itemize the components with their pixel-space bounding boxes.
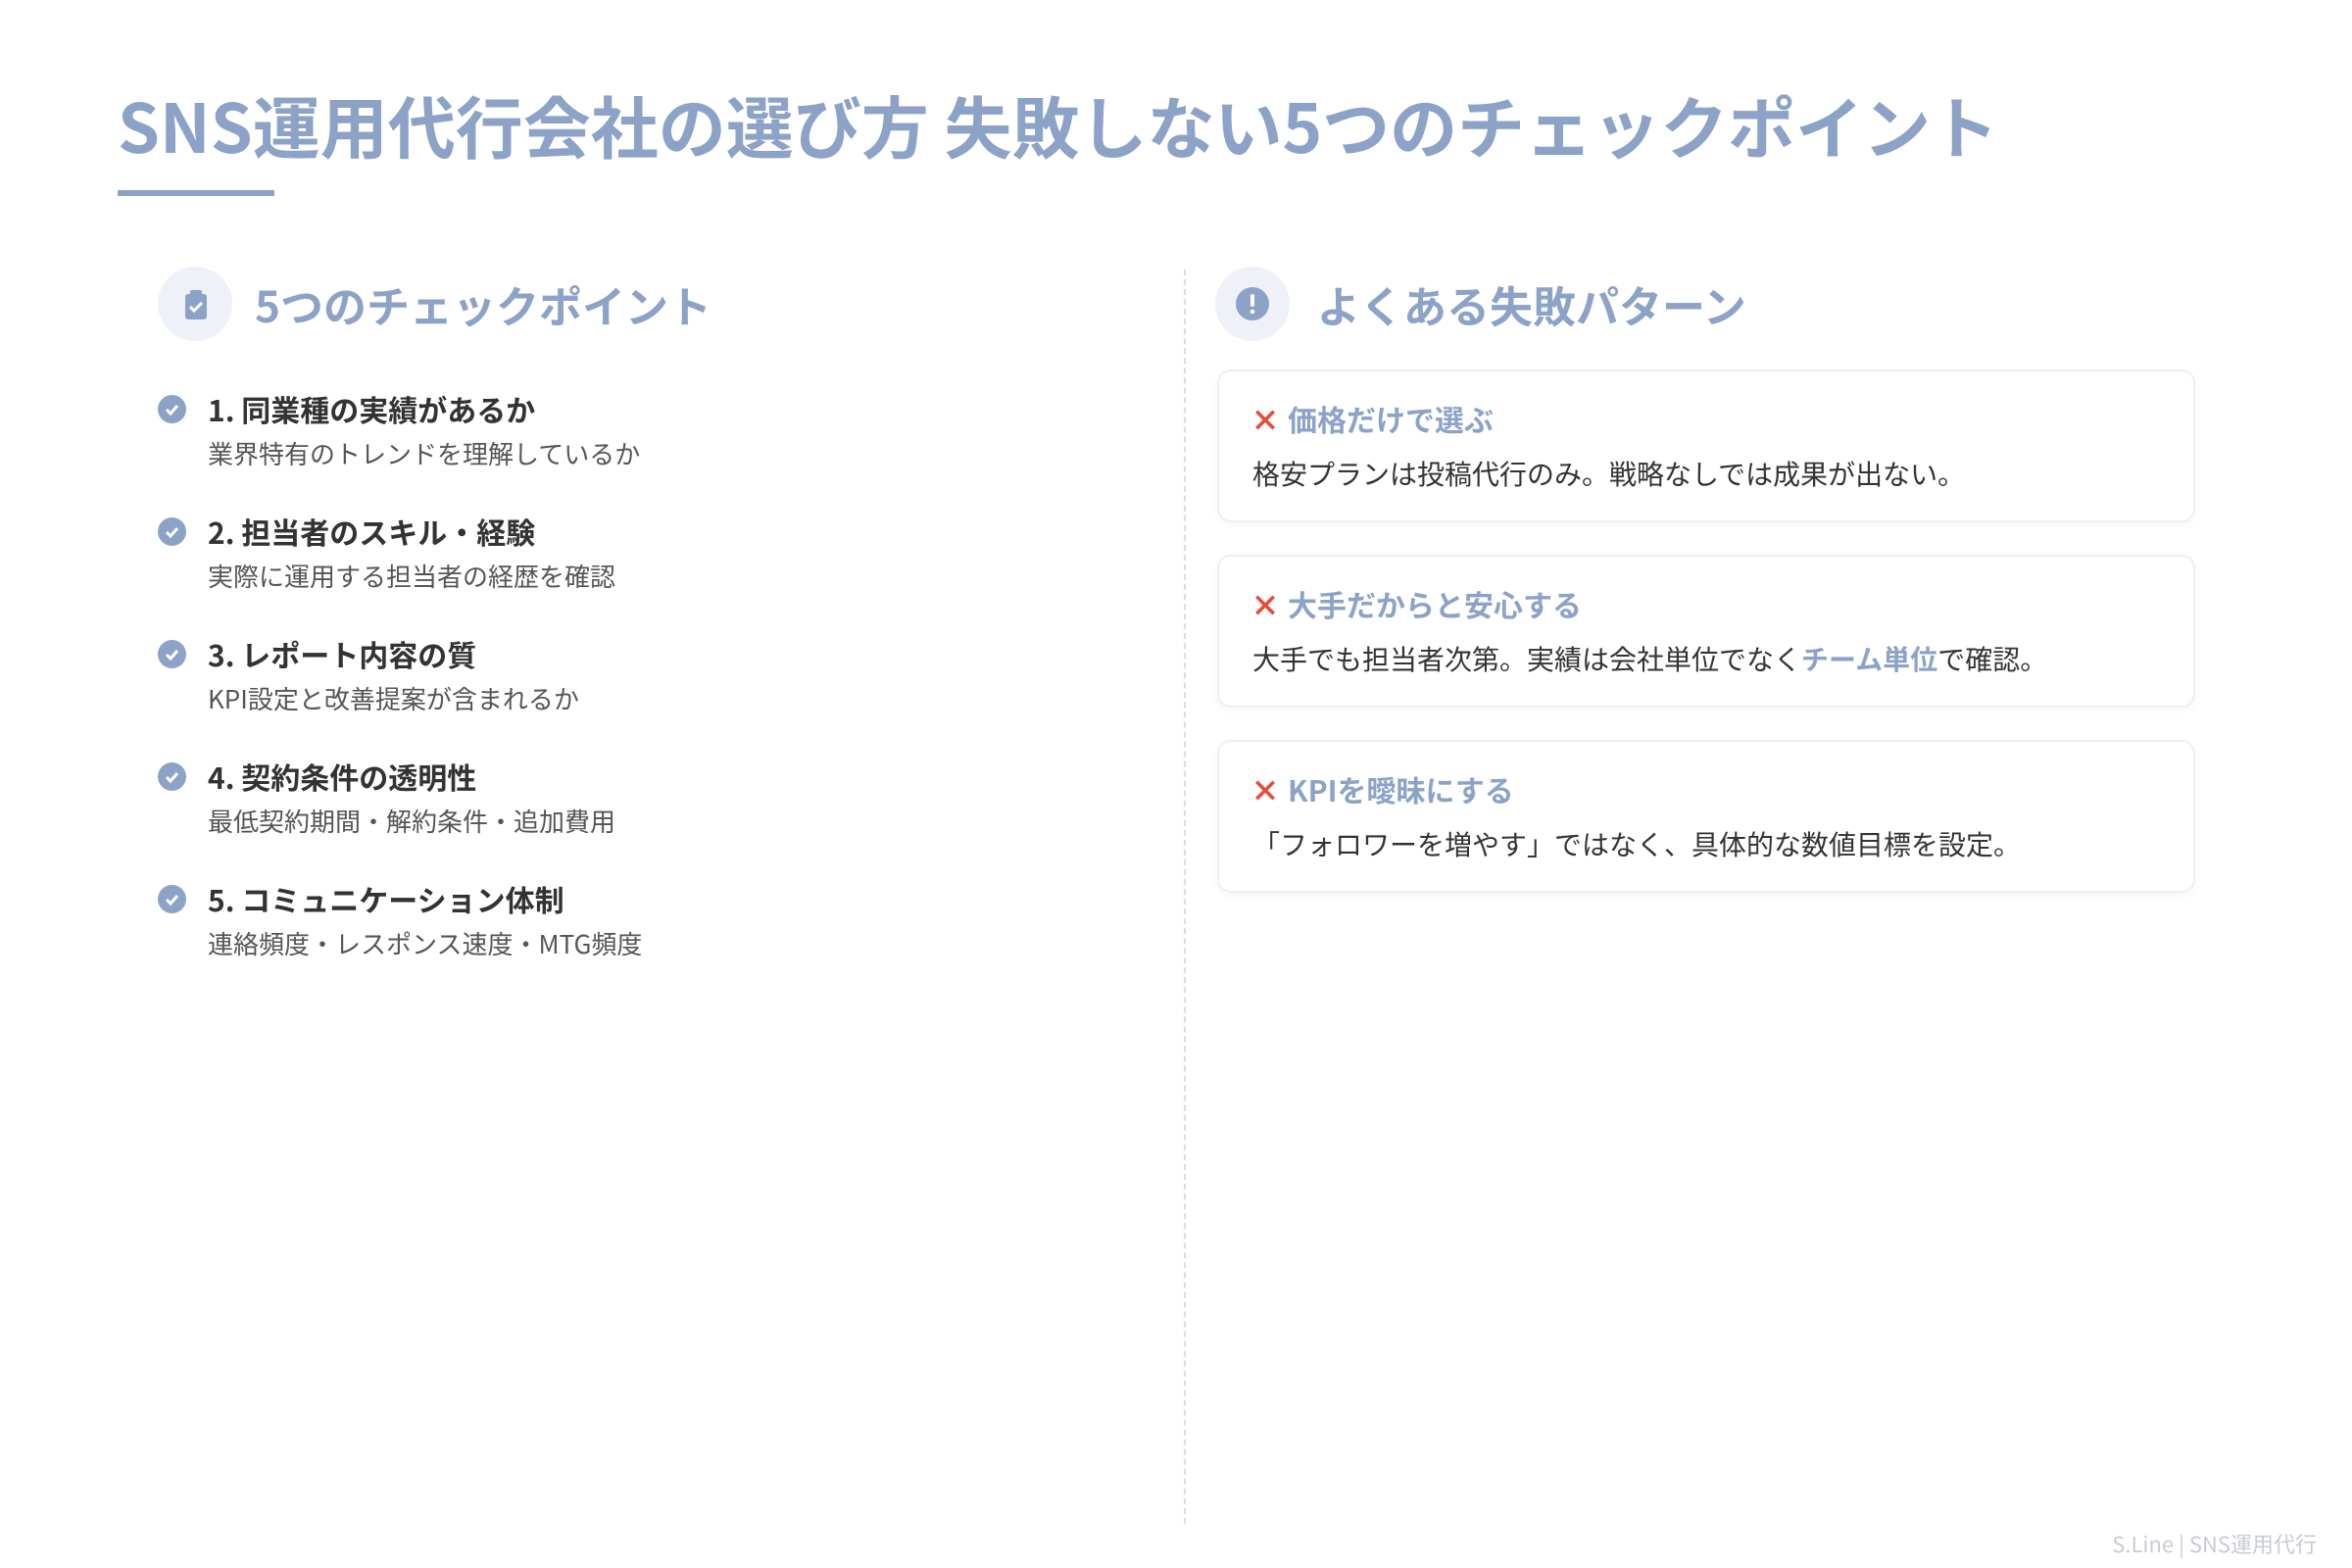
item 5 bbox=[158, 877, 642, 961]
card 1 bbox=[1217, 369, 2195, 522]
item 3 bbox=[158, 632, 579, 716]
item 2: 実際に運用する担当者の経歴を確認 bbox=[208, 558, 615, 594]
item 2 bbox=[158, 510, 615, 594]
card 3: × KPIを曖昧にする bbox=[1250, 767, 1514, 810]
item 1: 業界特有のトレンドを理解しているか bbox=[208, 435, 640, 471]
heading: よくある失敗パターン: よくある失敗パターン bbox=[1317, 272, 1746, 335]
item 5: 連絡頻度・レスポンス速度・MTG頻度 bbox=[208, 925, 642, 961]
item 4: 4. 契約条件の透明性 bbox=[208, 755, 476, 798]
card 1: × 価格だけで選ぶ bbox=[1250, 397, 1494, 440]
footer: S.Line | SNS運用代行 bbox=[2112, 1528, 2317, 1559]
title: SNS運用代行会社の選び方 失敗しない5つのチェックポイント bbox=[118, 74, 1998, 172]
icon: clipboard bbox=[158, 267, 232, 341]
item 4 bbox=[158, 755, 615, 839]
panel: failure patterns bbox=[1215, 267, 1746, 341]
card 2: 大手でも担当者次第。実績は会社単位でなくチーム単位で確認。 bbox=[1252, 639, 2047, 678]
item 3: 3. レポート内容の質 bbox=[208, 632, 476, 675]
heading: 5つのチェックポイント: 5つのチェックポイント bbox=[255, 272, 711, 335]
item 2: 2. 担当者のスキル・経験 bbox=[208, 510, 535, 553]
item 3: KPI設定と改善提案が含まれるか bbox=[208, 680, 579, 716]
item 4: 最低契約期間・解約条件・追加費用 bbox=[208, 803, 615, 839]
card 2 bbox=[1217, 555, 2195, 708]
item 1: 1. 同業種の実績があるか bbox=[208, 387, 535, 430]
checklist bbox=[158, 387, 642, 961]
card 2: × 大手だからと安心する bbox=[1250, 582, 1582, 625]
card 3 bbox=[1217, 740, 2195, 893]
card 1: 格安プランは投稿代行のみ。戦略なしでは成果が出ない。 bbox=[1252, 454, 1965, 493]
item 5: 5. コミュニケーション体制 bbox=[208, 877, 564, 920]
card 3: 「フォロワーを増やす」ではなく、具体的な数値目標を設定。 bbox=[1252, 824, 2021, 863]
panel: checkpoints bbox=[158, 267, 711, 341]
icon: exclamation bbox=[1215, 267, 1290, 341]
item 1 bbox=[158, 387, 640, 471]
